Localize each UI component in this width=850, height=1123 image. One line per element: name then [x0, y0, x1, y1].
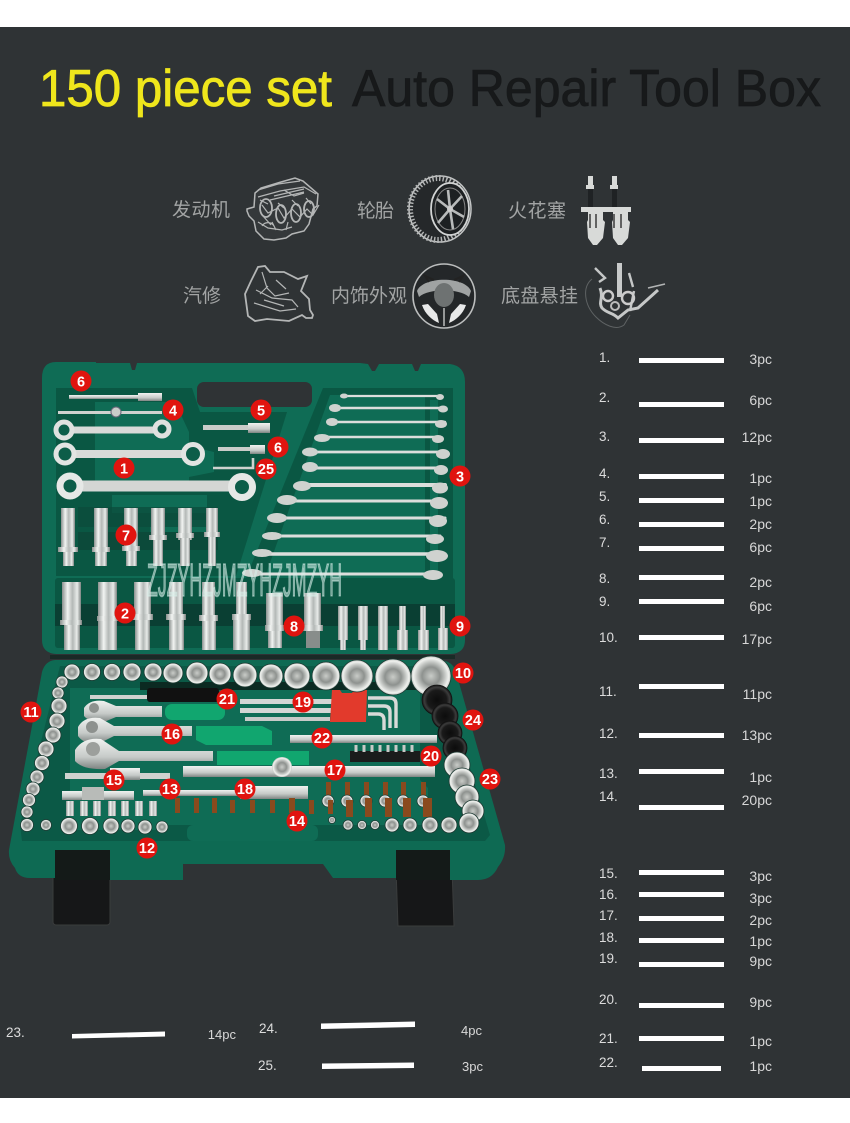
icon: mechanic: [245, 266, 313, 321]
row 23: 14pc: [208, 1027, 236, 1042]
tool: bit rail 20: [350, 745, 420, 762]
badge 2: 2: [121, 606, 129, 622]
badge 9: [450, 616, 470, 636]
tool: brown bits under 18: [175, 798, 314, 814]
badge 25: 25: [258, 462, 274, 478]
panel: application icons: [172, 176, 665, 328]
row 23: 23.: [6, 1025, 25, 1040]
row 17: [599, 908, 772, 928]
row 2: [599, 390, 772, 408]
row 25: 3pc: [462, 1059, 483, 1074]
tool: ratchet small: [84, 701, 225, 722]
badge 21: 21: [219, 692, 235, 708]
tools: deep sockets row 2: [60, 582, 251, 650]
row 8: [599, 571, 772, 590]
tool: breaker bar 17: [183, 757, 435, 777]
tools: sockets 8: [265, 593, 323, 648]
row 9: 9.: [599, 594, 610, 609]
tray inner: [20, 666, 490, 841]
row 22: 22.: [599, 1055, 618, 1070]
badge 23: 23: [482, 772, 498, 788]
badge 5: [250, 400, 272, 420]
row 12: 12.: [599, 726, 618, 741]
latch left: [53, 850, 110, 925]
row 18: 18.: [599, 930, 618, 945]
tool box: [6, 350, 772, 1074]
left pocket: [56, 388, 287, 576]
badge 6: 6: [77, 374, 85, 390]
badge 10: 10: [455, 666, 471, 682]
badge 6: 6: [274, 440, 282, 456]
row 5: 5.: [599, 489, 610, 504]
tools: socket bottom row: [60, 818, 168, 834]
badge 6: [70, 370, 92, 392]
title: 150 piece set: [39, 60, 333, 118]
row 13: [599, 766, 772, 785]
tool: hex key: [213, 458, 253, 468]
row 15: 15.: [599, 866, 618, 881]
label: engine: 发动机: [172, 199, 230, 221]
row 7: 7.: [599, 535, 610, 550]
row 3: [599, 429, 772, 445]
row 7: [599, 535, 772, 555]
row 5: 1pc: [749, 493, 772, 509]
tool: bars 19: [240, 699, 332, 721]
row 14: 20pc: [742, 792, 772, 808]
row 21: 1pc: [749, 1033, 772, 1049]
row 6: [599, 512, 772, 532]
tool: long bar with head: [69, 393, 162, 401]
parts list: [6, 350, 772, 1074]
badge 17: 17: [327, 763, 343, 779]
row 25: [258, 1058, 483, 1074]
tool: hex keys: [368, 698, 396, 730]
row 20: 9pc: [749, 994, 772, 1010]
row 11: 11.: [599, 684, 617, 699]
badge 3: [450, 466, 470, 486]
dark gap between lid and tray: [50, 655, 455, 659]
row 16: 16.: [599, 887, 618, 902]
tool: bar 22: [290, 735, 437, 743]
badge 12: [136, 838, 158, 858]
row 1: 3pc: [749, 351, 772, 367]
row 12: [599, 726, 772, 743]
row 6: 2pc: [749, 516, 772, 532]
badge 22: 22: [314, 731, 330, 747]
row 4: 1pc: [749, 470, 772, 486]
tools: socket bottom right row: [328, 816, 457, 833]
row 23: [6, 1025, 236, 1042]
tools: sockets 23: [444, 752, 484, 833]
row 10: [599, 630, 772, 647]
label: spark plug: 火花塞: [508, 200, 566, 222]
tools: brown bits: [322, 782, 432, 817]
row 11: 11pc: [743, 686, 772, 702]
icon: suspension: [586, 263, 665, 327]
row 18: [599, 930, 772, 949]
row 19: [599, 951, 772, 969]
handle cut-out: [197, 382, 312, 407]
icon: tire: [409, 176, 471, 242]
row 13: 1pc: [749, 769, 772, 785]
badge 17: [324, 760, 346, 780]
row 21: [599, 1031, 772, 1049]
row 24: 4pc: [461, 1023, 482, 1038]
tool: extension bar: [203, 423, 270, 433]
row 20: 20.: [599, 992, 618, 1007]
tools: socket left column: [20, 676, 68, 832]
badge 20: 20: [423, 749, 439, 765]
row 14: 14.: [599, 789, 618, 804]
row 14: [599, 789, 772, 810]
badge 25: [256, 458, 276, 480]
row 24: 24.: [259, 1021, 278, 1036]
tool: ratchet medium: [78, 718, 272, 745]
tools: socket top row: [64, 656, 451, 696]
row 1: 1.: [599, 350, 610, 365]
row 16: 3pc: [749, 890, 772, 906]
badge 18: 18: [237, 782, 253, 798]
row 12: 13pc: [742, 727, 772, 743]
row 2: 2.: [599, 390, 610, 405]
row 22: 1pc: [749, 1058, 772, 1074]
tool: bar with black grip 21: [90, 688, 219, 702]
tools: upright sockets: [66, 801, 157, 816]
row 15: [599, 866, 772, 884]
row 6: 6.: [599, 512, 610, 527]
badge 15: 15: [106, 773, 122, 789]
panel: lid of case: [42, 362, 465, 654]
label: chassis suspension: 底盘悬挂: [501, 285, 578, 307]
tools: sockets 9: [338, 606, 448, 650]
badge 4: 4: [169, 404, 177, 420]
badge 8: 8: [290, 620, 298, 636]
badge 16: 16: [164, 727, 180, 743]
badge 2: [114, 602, 136, 624]
lower pocket: [55, 578, 455, 648]
badge 1: 1: [120, 462, 128, 478]
badge 9: 9: [456, 620, 464, 636]
row 11: [599, 684, 772, 702]
row 25: 25.: [258, 1058, 277, 1073]
row 19: 9pc: [749, 953, 772, 969]
label: interior and exterior: 内饰外观: [331, 285, 407, 307]
badge 6: [268, 436, 288, 458]
badge 3: 3: [456, 470, 464, 486]
badge 8: [284, 616, 304, 636]
badge 13: 13: [162, 782, 178, 798]
row 2: 6pc: [749, 392, 772, 408]
badge 10: [452, 662, 474, 684]
badge 7: 7: [122, 528, 130, 544]
badge 4: [162, 400, 184, 420]
row 4: [599, 466, 772, 486]
badge 16: [162, 724, 182, 744]
number badges: [20, 370, 500, 858]
row 8: 8.: [599, 571, 610, 586]
title: Auto Repair Tool Box: [352, 60, 821, 118]
panel: tray of case: [9, 656, 505, 880]
row 1: [599, 350, 772, 367]
badge 11: 11: [23, 705, 39, 721]
badge 14: [286, 810, 308, 832]
row 24: [259, 1021, 482, 1038]
tool: T bar 18: [143, 786, 308, 799]
row 17: 2pc: [749, 912, 772, 928]
tools: ring wrenches: [56, 422, 252, 498]
tools: black sockets 24: [422, 685, 467, 760]
row 19: 19.: [599, 951, 618, 966]
badge 21: [216, 688, 238, 710]
dark band under top sockets: [140, 682, 430, 690]
badge 1: [114, 458, 134, 478]
title: [39, 60, 821, 118]
badge 23: [480, 768, 500, 790]
row 3: 12pc: [742, 429, 772, 445]
icon: steering wheel: [413, 264, 475, 328]
row 10: 10.: [599, 630, 618, 645]
label: car repair: 汽修: [183, 285, 221, 307]
tool: T handle: [58, 407, 162, 417]
row 10: 17pc: [742, 631, 772, 647]
label: tire: 轮胎: [357, 200, 394, 222]
icon: engine: [247, 178, 319, 240]
row 18: 1pc: [749, 933, 772, 949]
row 4: 4.: [599, 466, 610, 481]
row 21: 21.: [599, 1031, 618, 1046]
panel: lid of case: ZJZYHZJMZYHZJMZYH: [147, 554, 342, 606]
badge 20: [420, 746, 442, 766]
tools: combination wrenches: [242, 394, 450, 580]
badge 15: [104, 770, 124, 790]
tool: red hex key holder: [330, 690, 367, 722]
tool: ratchet large: [75, 739, 309, 769]
row 5: [599, 489, 772, 509]
row 17: 17.: [599, 908, 618, 923]
tool: extension 15: [62, 768, 170, 800]
badge 24: [462, 710, 484, 730]
row 13: 13.: [599, 766, 618, 781]
handle recess: [187, 825, 318, 841]
row 9: [599, 594, 772, 614]
row 16: [599, 887, 772, 906]
row 9: 6pc: [749, 598, 772, 614]
row 7: 6pc: [749, 539, 772, 555]
badge 22: [312, 728, 332, 748]
badge 14: 14: [289, 814, 305, 830]
tools: deep sockets row 7: [58, 508, 220, 566]
badge 12: 12: [139, 841, 155, 857]
icon: spark plugs: [581, 176, 631, 245]
badge 5: 5: [257, 404, 265, 420]
row 3: 3.: [599, 429, 610, 444]
row 20: [599, 992, 772, 1010]
badge 13: [160, 778, 180, 800]
row 8: 2pc: [749, 574, 772, 590]
badge 11: [20, 702, 42, 722]
right pocket: [242, 388, 453, 588]
badge 19: 19: [295, 695, 311, 711]
latch right: [396, 850, 454, 926]
tool: short extension: [218, 445, 265, 454]
badge 18: [234, 778, 256, 800]
badge 7: [116, 524, 136, 546]
badge 24: 24: [465, 713, 481, 729]
row 15: 3pc: [749, 868, 772, 884]
badge 19: [292, 692, 314, 712]
row 22: [599, 1055, 772, 1074]
